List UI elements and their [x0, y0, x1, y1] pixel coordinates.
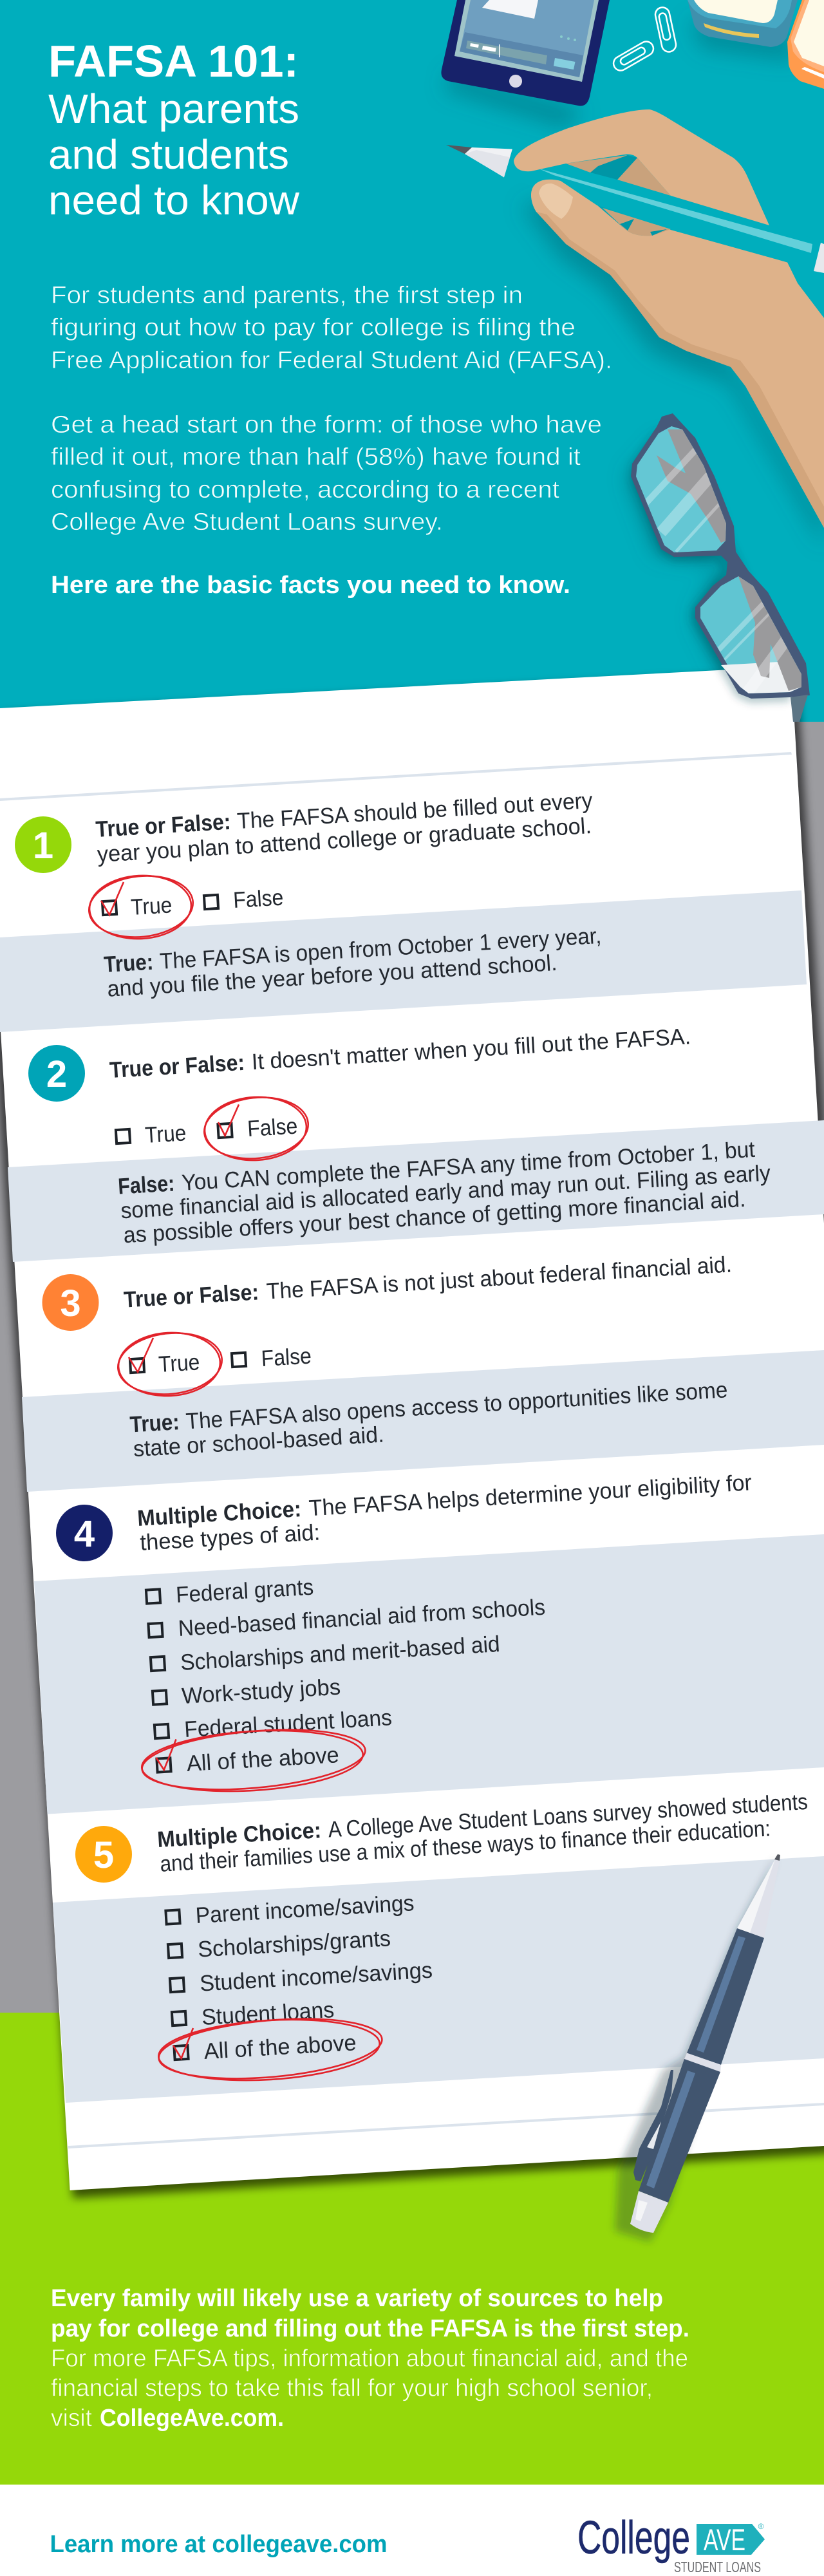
closing message: CollegeAve.com.	[100, 2405, 284, 2432]
question 5 options	[165, 1890, 433, 2030]
question 2 option false checked: False	[247, 1113, 298, 1142]
question 1 text: year you plan to attend college or graduate school.	[97, 813, 592, 867]
question 4 options: Scholarships and merit-based aid	[180, 1631, 501, 1675]
intro paragraph one: figuring out how to pay for college is filing the	[51, 314, 576, 341]
illustration: paper clips	[611, 6, 677, 73]
logo: College Ave Student Loans: AVE	[704, 2523, 745, 2557]
footer call to action: Learn more at collegeave.com	[50, 2531, 388, 2558]
question 2 option true: True	[144, 1120, 187, 1148]
question 4 badge: 4	[74, 1513, 95, 1555]
intro paragraph two: filled it out, more than half (58%) have found it	[51, 444, 581, 471]
illustration: stacked books	[688, 0, 824, 89]
question 1 text: The FAFSA should be filled out every	[236, 788, 594, 834]
closing message: Every family will likely use a variety of sources to help	[51, 2285, 663, 2312]
question 2 text: It doesn't matter when you fill out the FAFSA.	[251, 1024, 691, 1075]
logo: College Ave Student Loans	[577, 2512, 765, 2575]
question 3 badge: 3	[60, 1283, 81, 1324]
question 5 badge: 5	[93, 1834, 114, 1876]
question 2 option false checked	[201, 1093, 311, 1163]
question 3 option false: False	[261, 1343, 312, 1371]
question 4 options	[146, 1575, 546, 1742]
title: FAFSA 101:	[48, 36, 299, 86]
question 2 text: True or False:	[109, 1050, 245, 1083]
answer 2 text: some financial aid is allocated early and may run out. Filing as early	[120, 1160, 771, 1223]
question 2 text	[109, 1024, 691, 1083]
question 3 text	[123, 1252, 733, 1313]
question 3 option true checked: True	[158, 1349, 200, 1377]
question 5 text: and their families use a mix of these ways to finance their education:	[159, 1816, 771, 1877]
logo: College Ave Student Loans: ®	[758, 2522, 764, 2531]
question 4 badge	[56, 1505, 113, 1561]
question 2 badge: 2	[46, 1053, 67, 1095]
answer 1 text: and you file the year before you attend school.	[106, 950, 557, 1002]
answer band 5	[53, 1856, 824, 2103]
pen shadow	[615, 1857, 776, 2242]
closing message: For more FAFSA tips, information about financial aid, and the	[51, 2346, 688, 2373]
title: need to know	[48, 177, 300, 223]
question 4 text: these types of aid:	[139, 1520, 321, 1556]
question 1 option true checked	[86, 871, 196, 942]
background: white footer	[0, 2485, 824, 2576]
answer 2 text: You CAN complete the FAFSA any time from October 1, but	[181, 1137, 756, 1196]
question 5 options: Student loans	[201, 1997, 335, 2030]
question 3 text: The FAFSA is not just about federal financial aid.	[266, 1252, 733, 1304]
question 5 text: Multiple Choice:	[156, 1818, 322, 1852]
intro bold line: Here are the basic facts you need to know.	[51, 572, 570, 599]
intro paragraph one: For students and parents, the first step in	[51, 282, 523, 309]
answer 1 text: True:	[103, 950, 154, 977]
question 1 text: True or False:	[95, 809, 232, 842]
closing message: financial steps to take this fall for your high school senior,	[51, 2375, 653, 2402]
answer 3 text: The FAFSA also opens access to opportunities like some	[185, 1377, 728, 1434]
answer 2 text	[117, 1136, 773, 1248]
illustration: glasses	[631, 413, 810, 722]
logo: College Ave Student Loans: STUDENT LOANS	[674, 2559, 761, 2575]
answer 3 text	[129, 1377, 730, 1462]
question 1 option true checked: True	[130, 892, 173, 920]
question 4 options: Federal student loans	[183, 1705, 393, 1742]
answer 2 text: as possible offers your best chance of getting more financial aid.	[123, 1187, 746, 1248]
question 4 text: Multiple Choice:	[136, 1496, 302, 1531]
answer 1 text: The FAFSA is open from October 1 every year,	[159, 923, 602, 974]
answer band 3	[22, 1350, 824, 1492]
question 5 all of the above checked: All of the above	[203, 2030, 357, 2064]
question 4 all of the above checked	[140, 1722, 368, 1798]
answer band 1	[0, 890, 807, 1032]
question 1 option false: False	[232, 885, 284, 913]
question 3 option true checked	[115, 1328, 225, 1399]
answer band 2	[8, 1120, 824, 1262]
bottom rule	[68, 2103, 824, 2148]
intro paragraph one	[51, 282, 612, 374]
question 1 text	[95, 788, 595, 867]
soft shadows of hero objects	[444, 19, 824, 705]
question 1 badge	[15, 816, 71, 873]
intro paragraph two	[51, 411, 602, 536]
question 1 badge: 1	[33, 825, 53, 867]
question 3 text: True or False:	[123, 1279, 259, 1313]
answer 1 text	[103, 923, 603, 1002]
answer band 4	[34, 1534, 824, 1814]
intro paragraph two: Get a head start on the form: of those who have	[51, 411, 602, 438]
question 4 options: Federal grants	[175, 1575, 314, 1608]
question 5 options: Scholarships/grants	[197, 1926, 391, 1962]
illustration: tablet	[441, 0, 610, 106]
closing message: pay for college and filling out the FAFSA is the first step.	[51, 2315, 689, 2342]
question 3 badge	[42, 1274, 99, 1331]
illustration: pen	[630, 1854, 780, 2233]
top rule	[0, 752, 792, 801]
panel: quiz sheet	[0, 666, 824, 2190]
illustration: hand holding pencil	[446, 109, 824, 528]
background: green closing	[0, 2013, 824, 2485]
question 4 text	[136, 1470, 754, 1556]
question 4 all of the above checked: All of the above	[186, 1742, 340, 1776]
answer 3 text: state or school-based aid.	[133, 1422, 385, 1462]
intro paragraph two: College Ave Student Loans survey.	[51, 509, 443, 536]
question 5 all of the above checked	[156, 2011, 384, 2087]
answer 2 text: False:	[117, 1171, 175, 1199]
intro paragraph two: confusing to complete, according to a recent	[51, 476, 559, 503]
background: gray middle	[0, 722, 824, 2013]
question 2 badge	[28, 1045, 85, 1102]
question 4 options: Work-study jobs	[181, 1675, 341, 1709]
question 5 badge	[75, 1826, 132, 1883]
question 1 option false	[204, 885, 284, 913]
intro paragraph one: Free Application for Federal Student Aid (FAFSA).	[51, 347, 612, 374]
answer 3 text: True:	[129, 1409, 180, 1437]
question 4 options: Need-based financial aid from schools	[178, 1595, 546, 1641]
question 2 option true	[116, 1120, 187, 1148]
title: What parents	[48, 86, 299, 132]
question 4 text: The FAFSA helps determine your eligibility for	[308, 1470, 753, 1521]
question 5 options: Student income/savings	[199, 1957, 433, 1997]
title: and students	[48, 131, 289, 178]
question 3 option false	[232, 1343, 312, 1371]
background: teal hero	[0, 0, 824, 724]
question 5 options: Parent income/savings	[195, 1890, 415, 1928]
closing message: visit	[51, 2405, 92, 2432]
paper shadow	[0, 672, 824, 2198]
closing message	[51, 2285, 689, 2432]
title	[48, 36, 300, 223]
logo: College Ave Student Loans: College	[577, 2512, 690, 2564]
